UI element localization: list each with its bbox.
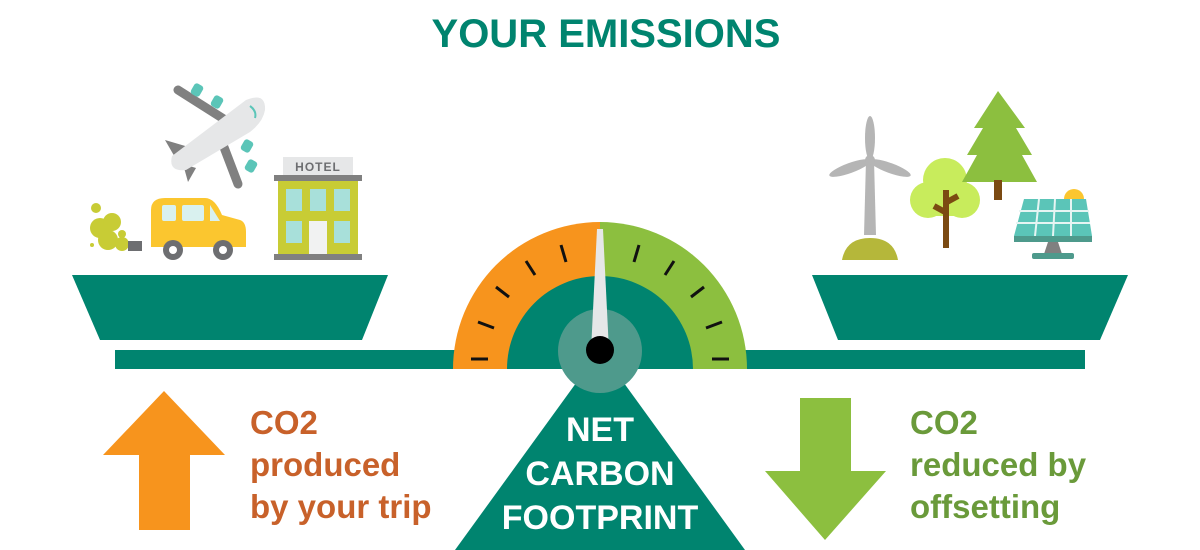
icon: wind turbine	[828, 116, 912, 260]
right tray	[812, 275, 1128, 340]
text: CO2 produced: CO2	[250, 404, 318, 441]
arrow: down green	[765, 398, 886, 540]
title: YOUR EMISSIONS	[432, 12, 780, 56]
icon: hotel: HOTEL	[295, 160, 341, 174]
icon: hotel	[274, 157, 362, 260]
text: CO2 produced: by your trip	[250, 488, 432, 525]
gauge	[453, 222, 747, 369]
text: CO2 reduced: CO2	[910, 404, 978, 441]
gauge hub and needle	[558, 229, 642, 393]
icon: pine tree	[962, 91, 1037, 200]
beam	[115, 350, 1085, 369]
triangle: net carbon footprint	[455, 350, 745, 550]
icon: airplane	[165, 82, 265, 184]
text: CO2 reduced	[910, 404, 1087, 525]
text: CO2 reduced: offsetting	[910, 488, 1060, 525]
text: CO2 reduced: reduced by	[910, 446, 1087, 483]
icon: round tree	[910, 158, 980, 248]
triangle: net carbon footprint: NET	[566, 411, 634, 449]
triangle: net carbon footprint: FOOTPRINT	[502, 499, 698, 537]
text: CO2 produced: produced	[250, 446, 400, 483]
icon: smoke	[90, 203, 142, 251]
arrow: up orange	[103, 391, 225, 530]
icon: solar panel	[1014, 189, 1092, 259]
icon: car	[151, 198, 246, 260]
text: CO2 produced	[250, 404, 432, 525]
left tray	[72, 275, 388, 340]
triangle: net carbon footprint: CARBON	[525, 455, 675, 493]
